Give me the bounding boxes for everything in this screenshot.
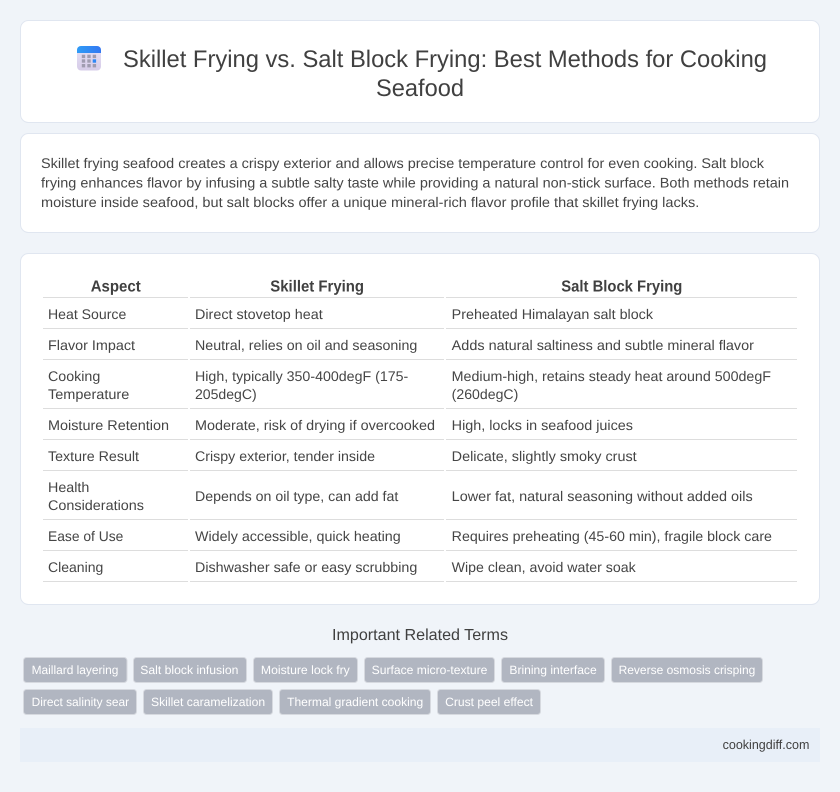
table header: Aspect <box>91 278 141 296</box>
tag: Crust peel effect <box>438 690 540 714</box>
table header <box>91 278 682 296</box>
tag: Brining interface: Brining interface <box>509 663 597 677</box>
tag: Moisture lock fry <box>254 658 358 682</box>
row: cleaning <box>48 559 637 575</box>
row: flavor impact: Flavor Impact <box>48 337 135 353</box>
tag: Maillard layering: Maillard layering <box>32 663 118 677</box>
title <box>123 46 767 102</box>
text block: introduction paragraph: Skillet frying seafood creates a crispy exterior and allows precise temperature control for even cooking. Salt block <box>41 155 765 171</box>
row: cleaning: Wipe clean, avoid water soak <box>452 559 637 575</box>
row: flavor impact <box>48 337 754 353</box>
row: cooking temperature: Temperature <box>48 386 130 402</box>
footer credit: cookingdiff.com <box>723 737 809 752</box>
row: heat source: Direct stovetop heat <box>195 306 323 322</box>
title: Skillet Frying vs. Salt Block Frying: Best Methods for Cooking <box>123 46 767 73</box>
row: flavor impact: Adds natural saltiness and subtle mineral flavor <box>452 337 754 353</box>
table header: Skillet Frying <box>270 278 364 296</box>
tag list <box>24 658 762 714</box>
tag: Brining interface <box>502 658 604 682</box>
row: cooking temperature: Medium-high, retains steady heat around 500degF <box>452 368 771 384</box>
row: ease of use: Ease of Use <box>48 528 124 544</box>
tag: Moisture lock fry: Moisture lock fry <box>261 663 350 677</box>
panel: introduction <box>20 134 820 232</box>
row: texture result: Texture Result <box>48 448 139 464</box>
row: health considerations: Depends on oil type, can add fat <box>195 488 398 504</box>
footer bar <box>20 728 820 762</box>
row: flavor impact: Neutral, relies on oil and seasoning <box>195 337 417 353</box>
row: health considerations: Lower fat, natural seasoning without added oils <box>452 488 753 504</box>
tag: Thermal gradient cooking: Thermal gradient cooking <box>287 695 423 709</box>
row: health considerations: Health <box>48 479 89 495</box>
row: cleaning: Dishwasher safe or easy scrubbing <box>195 559 417 575</box>
table header: Salt Block Frying <box>561 278 682 296</box>
row: cooking temperature <box>48 368 771 402</box>
tag: Salt block infusion <box>134 658 246 682</box>
tag: Direct salinity sear: Direct salinity sear <box>32 695 129 709</box>
tag: Reverse osmosis crisping <box>612 658 762 682</box>
panel: title card <box>20 20 820 122</box>
text block: introduction paragraph: frying enhances flavor by infusing a subtle salty taste while providing a natural non-stick surface. Both methods retain <box>41 174 789 190</box>
row: texture result: Crispy exterior, tender inside <box>195 448 375 464</box>
row: cooking temperature: High, typically 350-400degF (175- <box>195 368 409 384</box>
row: moisture retention: Moisture Retention <box>48 417 169 433</box>
panel: comparison table <box>20 254 820 604</box>
text block: introduction paragraph <box>41 155 789 210</box>
tag: Skillet caramelization: Skillet caramelization <box>151 695 265 709</box>
row: ease of use <box>48 528 772 544</box>
row: ease of use: Widely accessible, quick heating <box>195 528 401 544</box>
row: cooking temperature: Cooking <box>48 368 100 384</box>
row: moisture retention: High, locks in seafood juices <box>452 417 633 433</box>
tag: Surface micro-texture: Surface micro-texture <box>372 663 488 677</box>
row: ease of use: Requires preheating (45-60 min), fragile block care <box>452 528 772 544</box>
tag: Thermal gradient cooking <box>280 690 430 714</box>
row: cooking temperature: (260degC) <box>452 386 518 402</box>
row: health considerations <box>48 479 753 513</box>
row: moisture retention <box>48 417 633 433</box>
row: heat source: Heat Source <box>48 306 127 322</box>
tag: Crust peel effect: Crust peel effect <box>445 695 534 709</box>
row: cleaning: Cleaning <box>48 559 103 575</box>
tag: Direct salinity sear <box>24 690 136 714</box>
tag: Maillard layering <box>24 658 127 682</box>
tag: Skillet caramelization <box>144 690 272 714</box>
text block: introduction paragraph: moisture inside seafood, but salt blocks offer a unique mineral-rich flavor profile that skillet frying lacks. <box>41 194 699 210</box>
tag: Salt block infusion: Salt block infusion <box>140 663 238 677</box>
tag: Reverse osmosis crisping: Reverse osmosis crisping <box>619 663 755 677</box>
heading: important related terms: Important Related Terms <box>332 627 508 644</box>
row: heat source <box>48 306 654 322</box>
tag: Surface micro-texture <box>364 658 494 682</box>
row: cooking temperature: 205degC) <box>195 386 257 402</box>
row: moisture retention: Moderate, risk of drying if overcooked <box>195 417 435 433</box>
row: heat source: Preheated Himalayan salt block <box>452 306 654 322</box>
row: health considerations: Considerations <box>48 497 144 513</box>
row: texture result <box>48 448 637 464</box>
title: Seafood <box>376 75 464 102</box>
icon: calendar <box>77 46 101 70</box>
row: texture result: Delicate, slightly smoky crust <box>452 448 637 464</box>
